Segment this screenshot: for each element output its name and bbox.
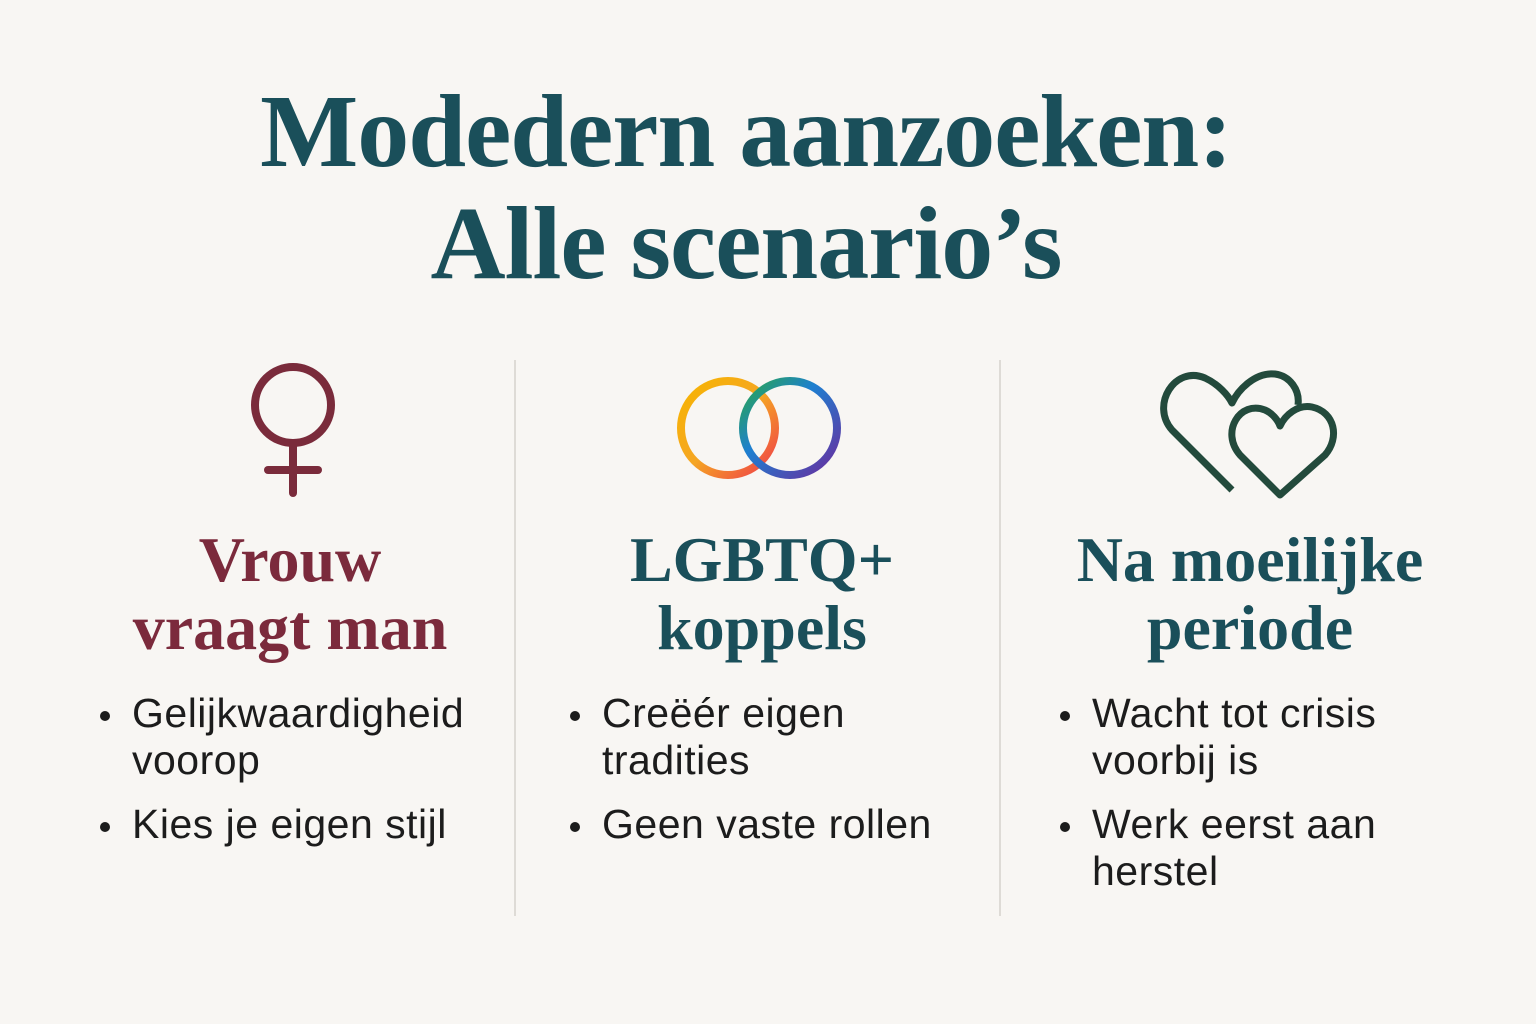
panel: vrouw vraagt man (251, 363, 335, 497)
heading: vrouw vraagt man (132, 524, 447, 663)
heading: vrouw vraagt man: vraagt man (133, 592, 447, 663)
bullets: periode: voorbij is (1092, 737, 1259, 783)
bullets: lgbtq (570, 690, 932, 847)
icon: rainbow rings (677, 377, 841, 479)
heading: LGBTQ+ (630, 524, 894, 663)
title (260, 74, 1232, 301)
heading: na moeilijke periode: periode (1147, 592, 1353, 663)
heading: LGBTQ+: koppels (657, 592, 867, 663)
heading: vrouw vraagt man: Vrouw (199, 524, 381, 595)
bullets: lgbtq: tradities (602, 737, 750, 783)
title: Alle scenario’s (430, 186, 1062, 301)
bullets: lgbtq: Geen vaste rollen (602, 801, 932, 847)
title: Modedern aanzoeken: (260, 74, 1232, 189)
heading: na moeilijke periode: Na moeilijke (1077, 524, 1423, 595)
bullets: vrouw: voorop (132, 737, 260, 783)
heading: LGBTQ+: LGBTQ+ (630, 524, 894, 595)
icon: two hearts (1160, 370, 1338, 498)
bullets: periode: Wacht tot crisis (1092, 690, 1376, 736)
bullets: vrouw (100, 690, 464, 847)
bullets: vrouw: Kies je eigen stijl (132, 801, 447, 847)
bullets: periode: Werk eerst aan (1092, 801, 1376, 847)
bullets: periode (1060, 690, 1376, 894)
icon: female symbol (251, 363, 335, 497)
bullets: lgbtq: Creëér eigen (602, 690, 845, 736)
bullets: vrouw: Gelijkwaardigheid (132, 690, 464, 736)
heading: na moeilijke periode (1077, 524, 1423, 663)
bullets: periode: herstel (1092, 848, 1219, 894)
